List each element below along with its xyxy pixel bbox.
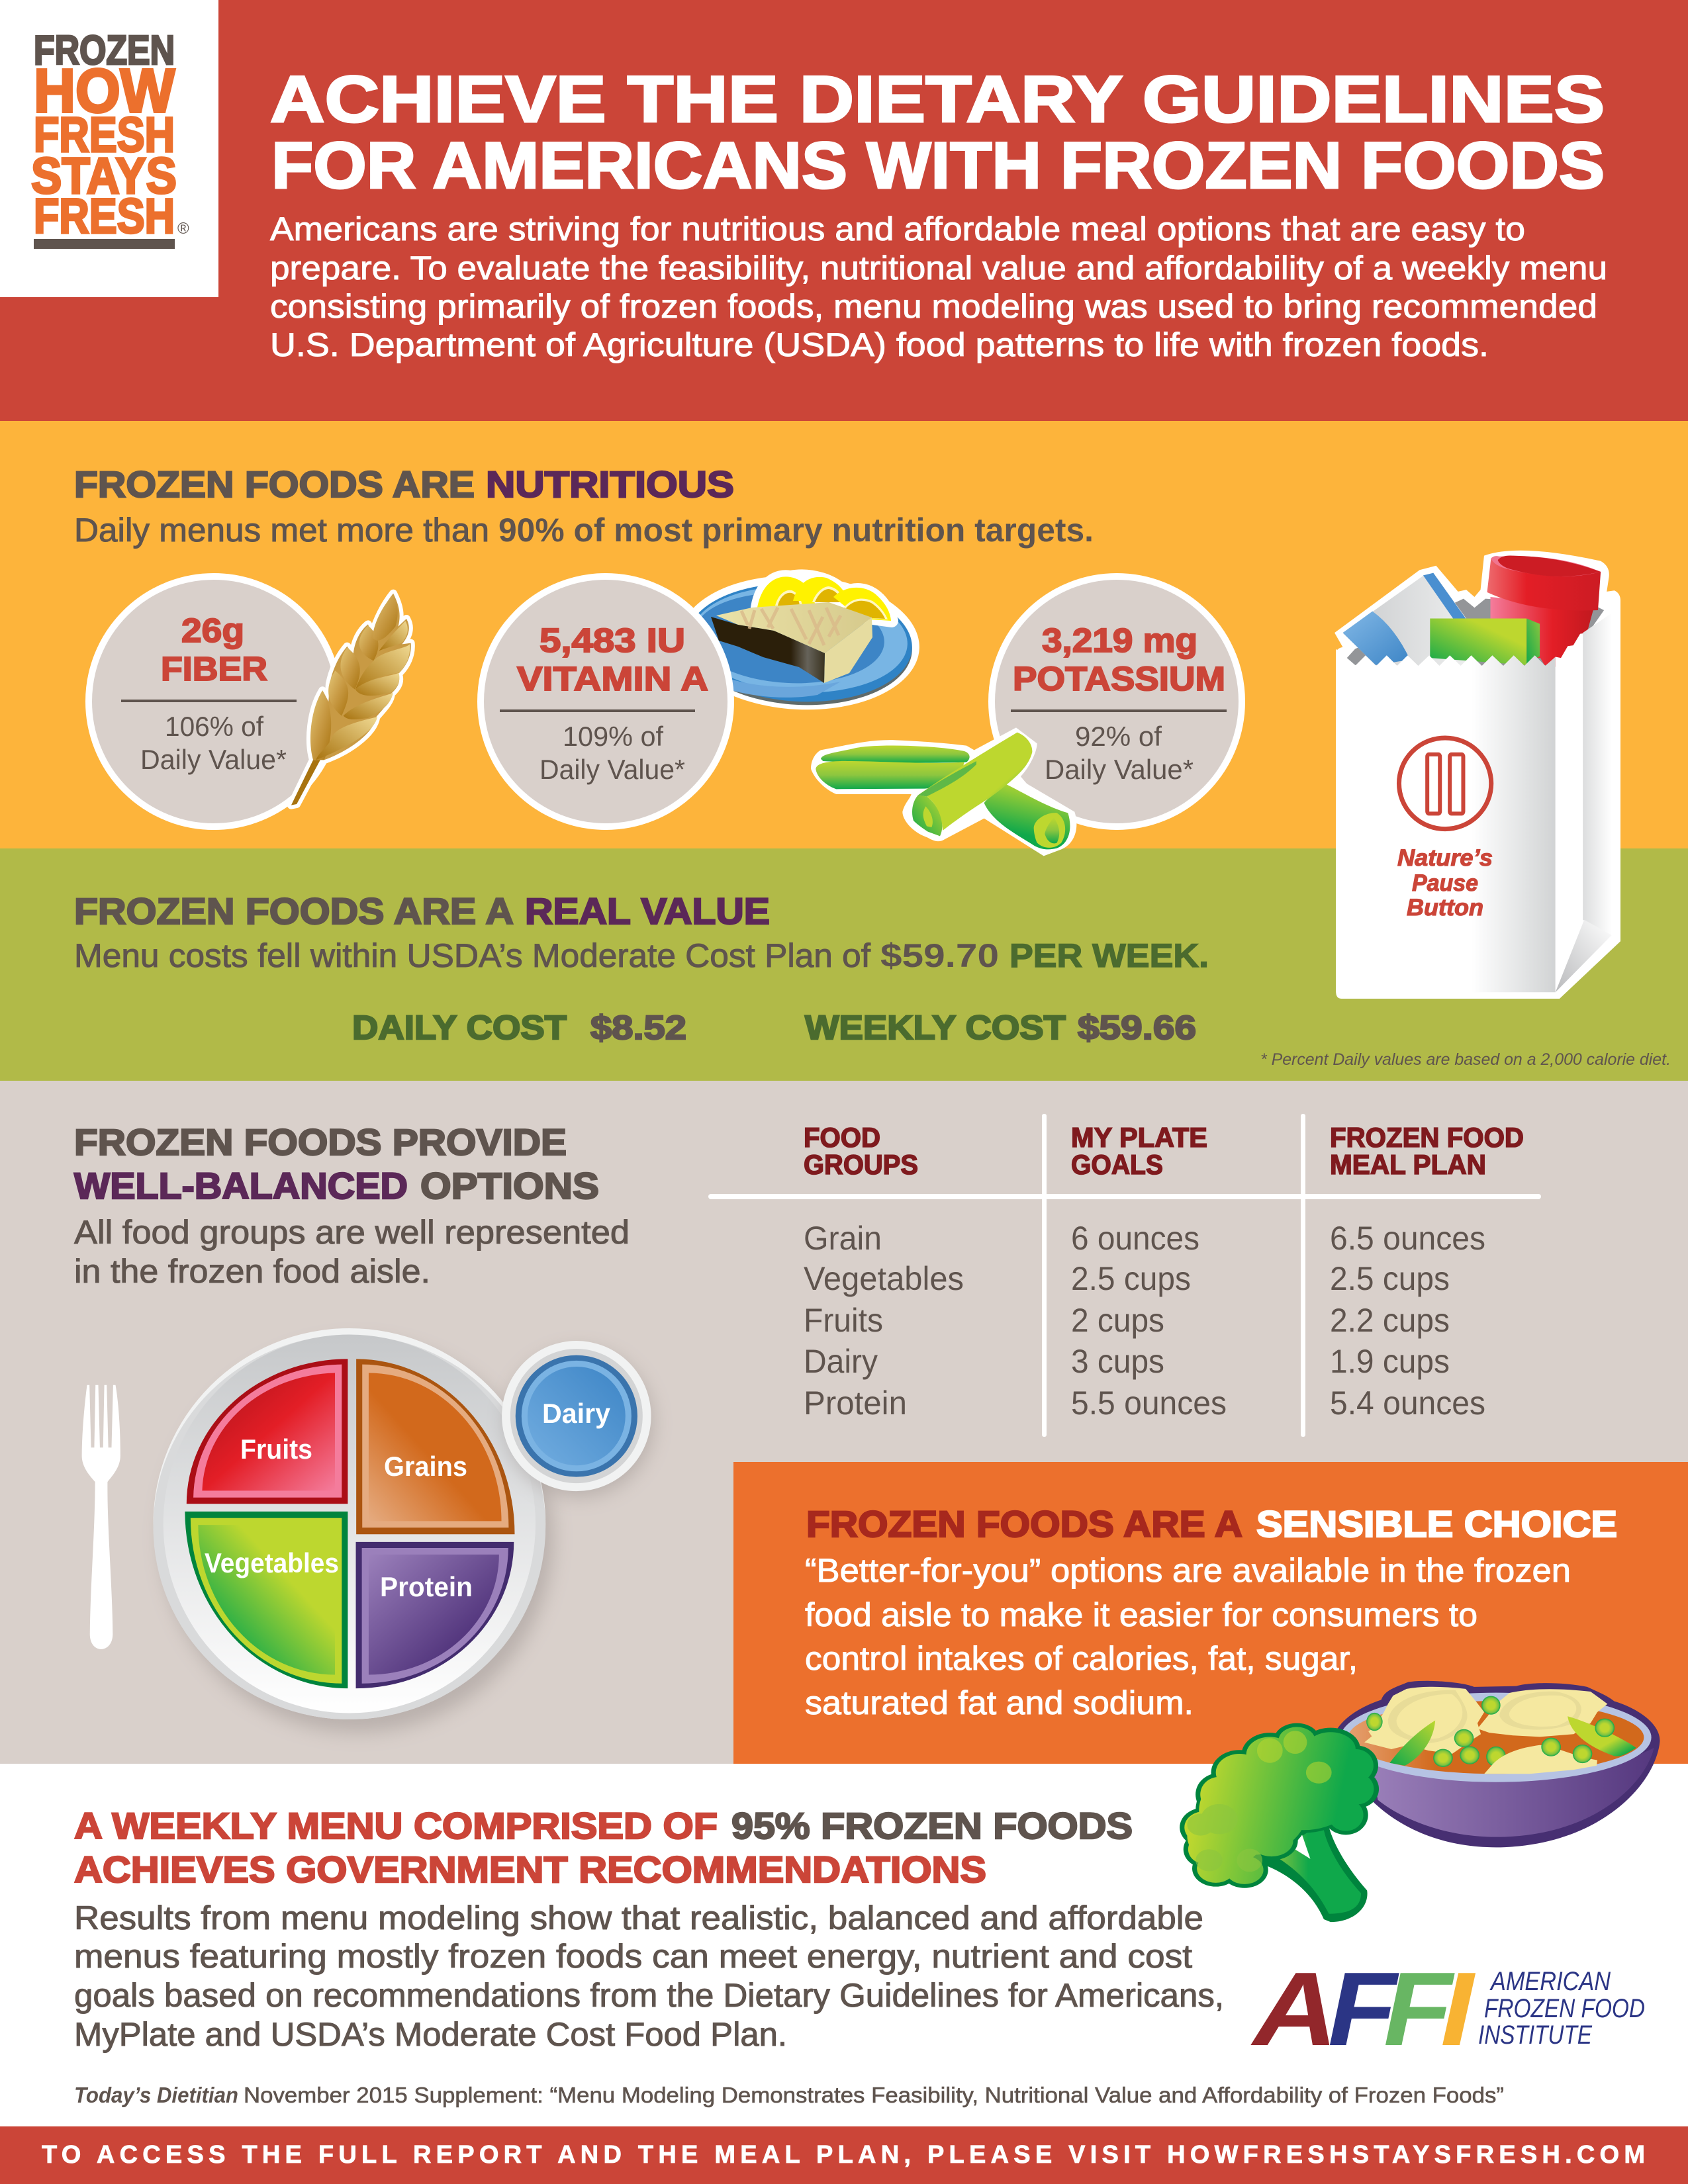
heading: weekly menu: ACHIEVES GOVERNMENT RECOMMENDATIONS [74, 1848, 986, 1890]
column: food groups: Fruits [804, 1302, 883, 1339]
segment: fruits [187, 1359, 348, 1504]
circle: vitamin A: Daily Value* [539, 754, 685, 785]
subheading: nutrition targets: Daily menus met more than [74, 512, 489, 549]
column: my plate goals: MY PLATE [1071, 1122, 1207, 1153]
title: ACHIEVE THE DIETARY GUIDELINES [270, 62, 1605, 136]
heading: sensible choice: SENSIBLE CHOICE [1256, 1503, 1617, 1545]
daily cost: $8.52 [590, 1009, 686, 1046]
circle: fiber: 106% of [165, 711, 263, 742]
subheading: nutrition targets: 90% of most primary nutrition targets. [498, 512, 1094, 549]
column: my plate goals: 2 cups [1071, 1302, 1164, 1339]
column: frozen food meal plan: 6.5 ounces [1330, 1220, 1485, 1257]
circle: fiber: FIBER [161, 650, 267, 688]
text: better-for-you: food aisle to make it easier for consumers to [805, 1596, 1477, 1633]
icon: broccoli [1180, 1723, 1379, 1922]
weekly cost: WEEKLY COST [805, 1009, 1066, 1046]
weekly cost: $59.66 [1078, 1009, 1196, 1046]
footnote: * Percent Daily values are based on a 2,000 calorie diet. [1260, 1050, 1671, 1069]
icon: dairy cup: Dairy [542, 1398, 611, 1429]
column: frozen food meal plan: 2.5 cups [1330, 1260, 1450, 1297]
column: my plate goals: GOALS [1071, 1149, 1163, 1180]
panel: header [0, 0, 1688, 421]
text: results: menus featuring mostly frozen foods can meet energy, nutrient and cost [74, 1938, 1192, 1975]
heading: nutritious [74, 463, 734, 505]
icon: grocery bag [1335, 551, 1620, 999]
circle: vitamin A [481, 576, 731, 827]
logo: AFFI: A [1250, 1951, 1338, 2068]
intro text [270, 210, 1607, 363]
title [270, 62, 1605, 202]
panel: weekly menu [0, 1764, 1688, 2126]
panel: nutritious [0, 421, 1688, 848]
column: frozen food meal plan: 1.9 cups [1330, 1343, 1450, 1380]
bag label: Nature's Pause Button [1397, 845, 1493, 921]
text: results [74, 1899, 1224, 2053]
logo: Frozen How Fresh Stays Fresh: FROZEN [34, 28, 175, 73]
icon: dairy cup [502, 1341, 653, 1497]
panel: well-balanced [0, 1081, 1688, 1764]
logo: AFFI: INSTITUTE [1478, 2021, 1593, 2050]
logo: Frozen How Fresh Stays Fresh: FRESH [34, 189, 175, 244]
logo: AFFI: FROZEN FOOD [1484, 1994, 1645, 2023]
heading: well-balanced: OPTIONS [420, 1165, 599, 1206]
text: results: MyPlate and USDA’s Moderate Cost Food Plan. [74, 2016, 787, 2053]
circle: potassium [992, 576, 1242, 827]
column: my plate goals: 5.5 ounces [1071, 1385, 1227, 1422]
footer banner [0, 2126, 1688, 2184]
bag label: Nature's Pause Button: Button [1407, 895, 1483, 921]
source citation: Today’s Dietitian [74, 2083, 238, 2107]
column: food groups: FOOD [804, 1122, 880, 1153]
text: better-for-you: saturated fat and sodium. [805, 1684, 1194, 1721]
daily cost [352, 1009, 686, 1046]
label: vegetables: Vegetables [205, 1547, 339, 1578]
label: fruits: Fruits [240, 1433, 312, 1465]
source citation: November 2015 Supplement: “Menu Modeling Demonstrates Feasibility, Nutritional Value and Affordability of Frozen Foods” [244, 2083, 1504, 2107]
heading: weekly menu: 95% FROZEN FOODS [731, 1805, 1133, 1846]
intro text: prepare. To evaluate the feasibility, nutritional value and affordability of a weekly menu [270, 250, 1607, 287]
segment: vegetables [185, 1512, 348, 1688]
column: frozen food meal plan: FROZEN FOOD [1330, 1122, 1524, 1153]
logo: Frozen How Fresh Stays Fresh [0, 0, 218, 297]
column: frozen food meal plan: MEAL PLAN [1330, 1149, 1486, 1180]
subheading: menu costs: PER WEEK. [1009, 937, 1209, 974]
logo: AFFI [1250, 1951, 1645, 2068]
column: my plate goals: 2.5 cups [1071, 1260, 1191, 1297]
circle: fiber [89, 576, 339, 827]
heading: well-balanced: WELL-BALANCED [74, 1165, 408, 1206]
circle: potassium: POTASSIUM [1013, 660, 1225, 698]
icon: wheat [291, 594, 411, 805]
logo: Frozen How Fresh Stays Fresh: HOW [34, 56, 175, 125]
intro text: Americans are striving for nutritious and affordable meal options that are easy to [270, 210, 1525, 248]
circle: fiber: Daily Value* [140, 744, 287, 775]
logo: AFFI: F [1328, 1951, 1399, 2068]
circle: potassium: 3,219 mg [1042, 621, 1197, 659]
text: better-for-you: “Better-for-you” options are available in the frozen [805, 1552, 1571, 1589]
bag label: Nature's Pause Button: Nature’s [1397, 845, 1493, 871]
text: results: Results from menu modeling show that realistic, balanced and affordable [74, 1899, 1203, 1936]
icon: pasta bowl [1334, 1681, 1660, 1847]
heading: weekly menu [74, 1805, 1133, 1890]
icon: fish with lemon [711, 576, 892, 683]
label: grains: Grains [384, 1451, 467, 1482]
logo: AFFI: F [1383, 1951, 1455, 2068]
heading: sensible choice [806, 1503, 1617, 1545]
text: better-for-you: control intakes of calories, fat, sugar, [805, 1640, 1358, 1677]
segment: grains [356, 1359, 515, 1534]
icon: fork [82, 1385, 120, 1649]
intro text: U.S. Department of Agriculture (USDA) food patterns to life with frozen foods. [270, 326, 1489, 363]
text: food groups [74, 1214, 630, 1290]
column: food groups: Grain [804, 1220, 882, 1257]
column: frozen food meal plan: 5.4 ounces [1330, 1385, 1485, 1422]
panel: real value [0, 848, 1688, 1081]
subheading: nutrition targets [74, 512, 1094, 549]
heading: weekly menu: A WEEKLY MENU COMPRISED OF [74, 1805, 718, 1846]
heading: well-balanced [74, 1121, 599, 1206]
logo: Frozen How Fresh Stays Fresh: ® [177, 220, 189, 238]
text: results: goals based on recommendations from the Dietary Guidelines for Americans, [74, 1977, 1224, 2014]
title: FOR AMERICANS WITH FROZEN FOODS [271, 128, 1605, 202]
logo: AFFI: AMERICAN [1489, 1967, 1611, 1996]
logo: AFFI: I [1440, 1951, 1476, 2068]
circle: vitamin A: 109% of [563, 721, 663, 752]
table: food groups [708, 1114, 1541, 1437]
circle: vitamin A: 5,483 IU [539, 621, 685, 659]
heading: real value: REAL VALUE [525, 890, 770, 932]
column: food groups: GROUPS [804, 1149, 918, 1180]
column: food groups: Dairy [804, 1343, 878, 1380]
chart: MyPlate [154, 1328, 553, 1733]
subheading: menu costs [74, 937, 1209, 974]
subheading: menu costs: $59.70 [880, 937, 999, 974]
panel: sensible choice [733, 1462, 1688, 1764]
subheading: menu costs: Menu costs fell within USDA’s Moderate Cost Plan of [74, 937, 870, 974]
heading: nutritious: NUTRITIOUS [486, 463, 734, 505]
column: food groups [804, 1122, 964, 1422]
daily cost: DAILY COST [352, 1009, 567, 1046]
text: better-for-you [805, 1552, 1571, 1721]
circle: vitamin A: VITAMIN A [517, 660, 708, 698]
heading: nutritious: FROZEN FOODS ARE [74, 463, 475, 505]
icon: plate rim [677, 570, 923, 715]
logo: Frozen How Fresh Stays Fresh: FRESH [34, 107, 175, 162]
footer banner: TO ACCESS THE FULL REPORT AND THE MEAL PLAN, PLEASE VISIT HOWFRESHSTAYSFRESH.COM [42, 2141, 1645, 2169]
icon: green beans [811, 727, 1076, 856]
heading: sensible choice: FROZEN FOODS ARE A [806, 1503, 1243, 1545]
column: frozen food meal plan: 2.2 cups [1330, 1302, 1450, 1339]
circle: potassium: 92% of [1075, 721, 1162, 752]
column: my plate goals: 3 cups [1071, 1343, 1164, 1380]
heading: real value: FROZEN FOODS ARE A [74, 890, 514, 932]
column: my plate goals: 6 ounces [1071, 1220, 1199, 1257]
heading: well-balanced: FROZEN FOODS PROVIDE [74, 1121, 567, 1163]
segment: protein [356, 1542, 514, 1688]
bag label: Nature's Pause Button: Pause [1412, 870, 1478, 896]
label: protein: Protein [380, 1571, 473, 1602]
column: frozen food meal plan [1330, 1122, 1524, 1422]
column: my plate goals [1071, 1122, 1227, 1422]
heading: real value [74, 890, 770, 932]
circle: fiber: 26g [181, 612, 244, 649]
column: food groups: Vegetables [804, 1260, 964, 1297]
text: food groups: in the frozen food aisle. [74, 1253, 430, 1290]
logo: Frozen How Fresh Stays Fresh: STAYS [31, 148, 177, 205]
circle: potassium: Daily Value* [1045, 754, 1194, 785]
weekly cost [805, 1009, 1196, 1046]
column: food groups: Protein [804, 1385, 907, 1422]
intro text: consisting primarily of frozen foods, menu modeling was used to bring recommended [270, 288, 1597, 325]
text: food groups: All food groups are well represented [74, 1214, 630, 1251]
